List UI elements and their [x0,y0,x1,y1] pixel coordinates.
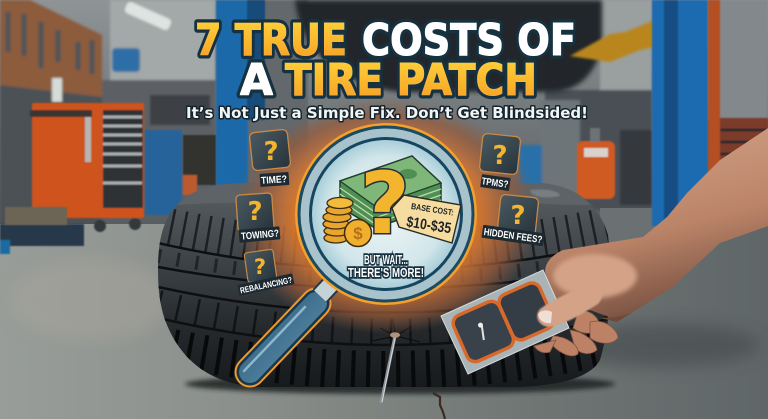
orange glow halo [234,98,538,334]
title: TIRE PATCH [285,55,537,106]
question card: time: ? [263,137,279,167]
money stack [340,156,441,228]
dollar coin [344,220,372,246]
question card: rebalancing: ? [254,255,266,279]
lens caption: THERE'S MORE! [348,266,424,280]
question card: tpms [479,133,521,191]
right tool cart [708,0,768,198]
magnifier lens [312,140,460,288]
title: 7 TRUE [195,15,347,66]
question card: towing: TOWING? [241,228,279,243]
hand: arm, palm and fingers [534,128,768,356]
blue lift post left [216,0,265,185]
question card: towing [236,193,280,243]
coin stack [323,198,353,243]
lens caption: BUT WAIT... [364,253,408,267]
orange tank [577,128,615,199]
floor [0,208,768,419]
patch pad left [450,298,516,365]
hand: thumb [537,282,603,327]
tire shadow [185,374,615,394]
floor crack [433,393,445,419]
lens caption [348,253,424,280]
title: A [240,55,273,106]
blue lift post right [652,0,708,226]
question card: rebalancing [237,249,294,296]
price tag text: $10-$35 [405,213,452,237]
orange tool cart [30,103,144,232]
question card: hidden fees: HIDDEN FEES? [483,227,543,246]
price tag [392,195,461,243]
yellow lift arm [570,16,668,62]
question card: tpms: ? [492,141,508,171]
puncture nail [372,318,420,403]
magnifier handle [244,281,334,372]
question card: hidden fees: ? [510,201,526,231]
question card: time: TIME? [261,174,287,187]
car wheel overhead [295,0,602,92]
subtitle: It’s Not Just a Simple Fix. Don’t Get Blindsided! [186,104,588,122]
dollar coin: $ [353,224,363,243]
patch pad right [496,280,556,343]
price tag text [405,201,455,237]
blue cabinet and pallet jack [0,130,216,254]
question card: towing: ? [247,197,263,227]
tire with tread [158,183,609,387]
patch card [441,270,569,374]
question card: tpms: TPMS? [481,176,509,191]
question card: rebalancing: REBALANCING? [239,275,293,295]
title: COSTS OF [362,15,576,66]
title [195,15,576,106]
garage background [0,0,768,240]
price tag text: BASE COST: [410,201,455,218]
question card: hidden fees [481,194,545,246]
question card: time [249,129,291,187]
magnifying glass [244,123,477,372]
big question mark: ? [360,154,410,254]
